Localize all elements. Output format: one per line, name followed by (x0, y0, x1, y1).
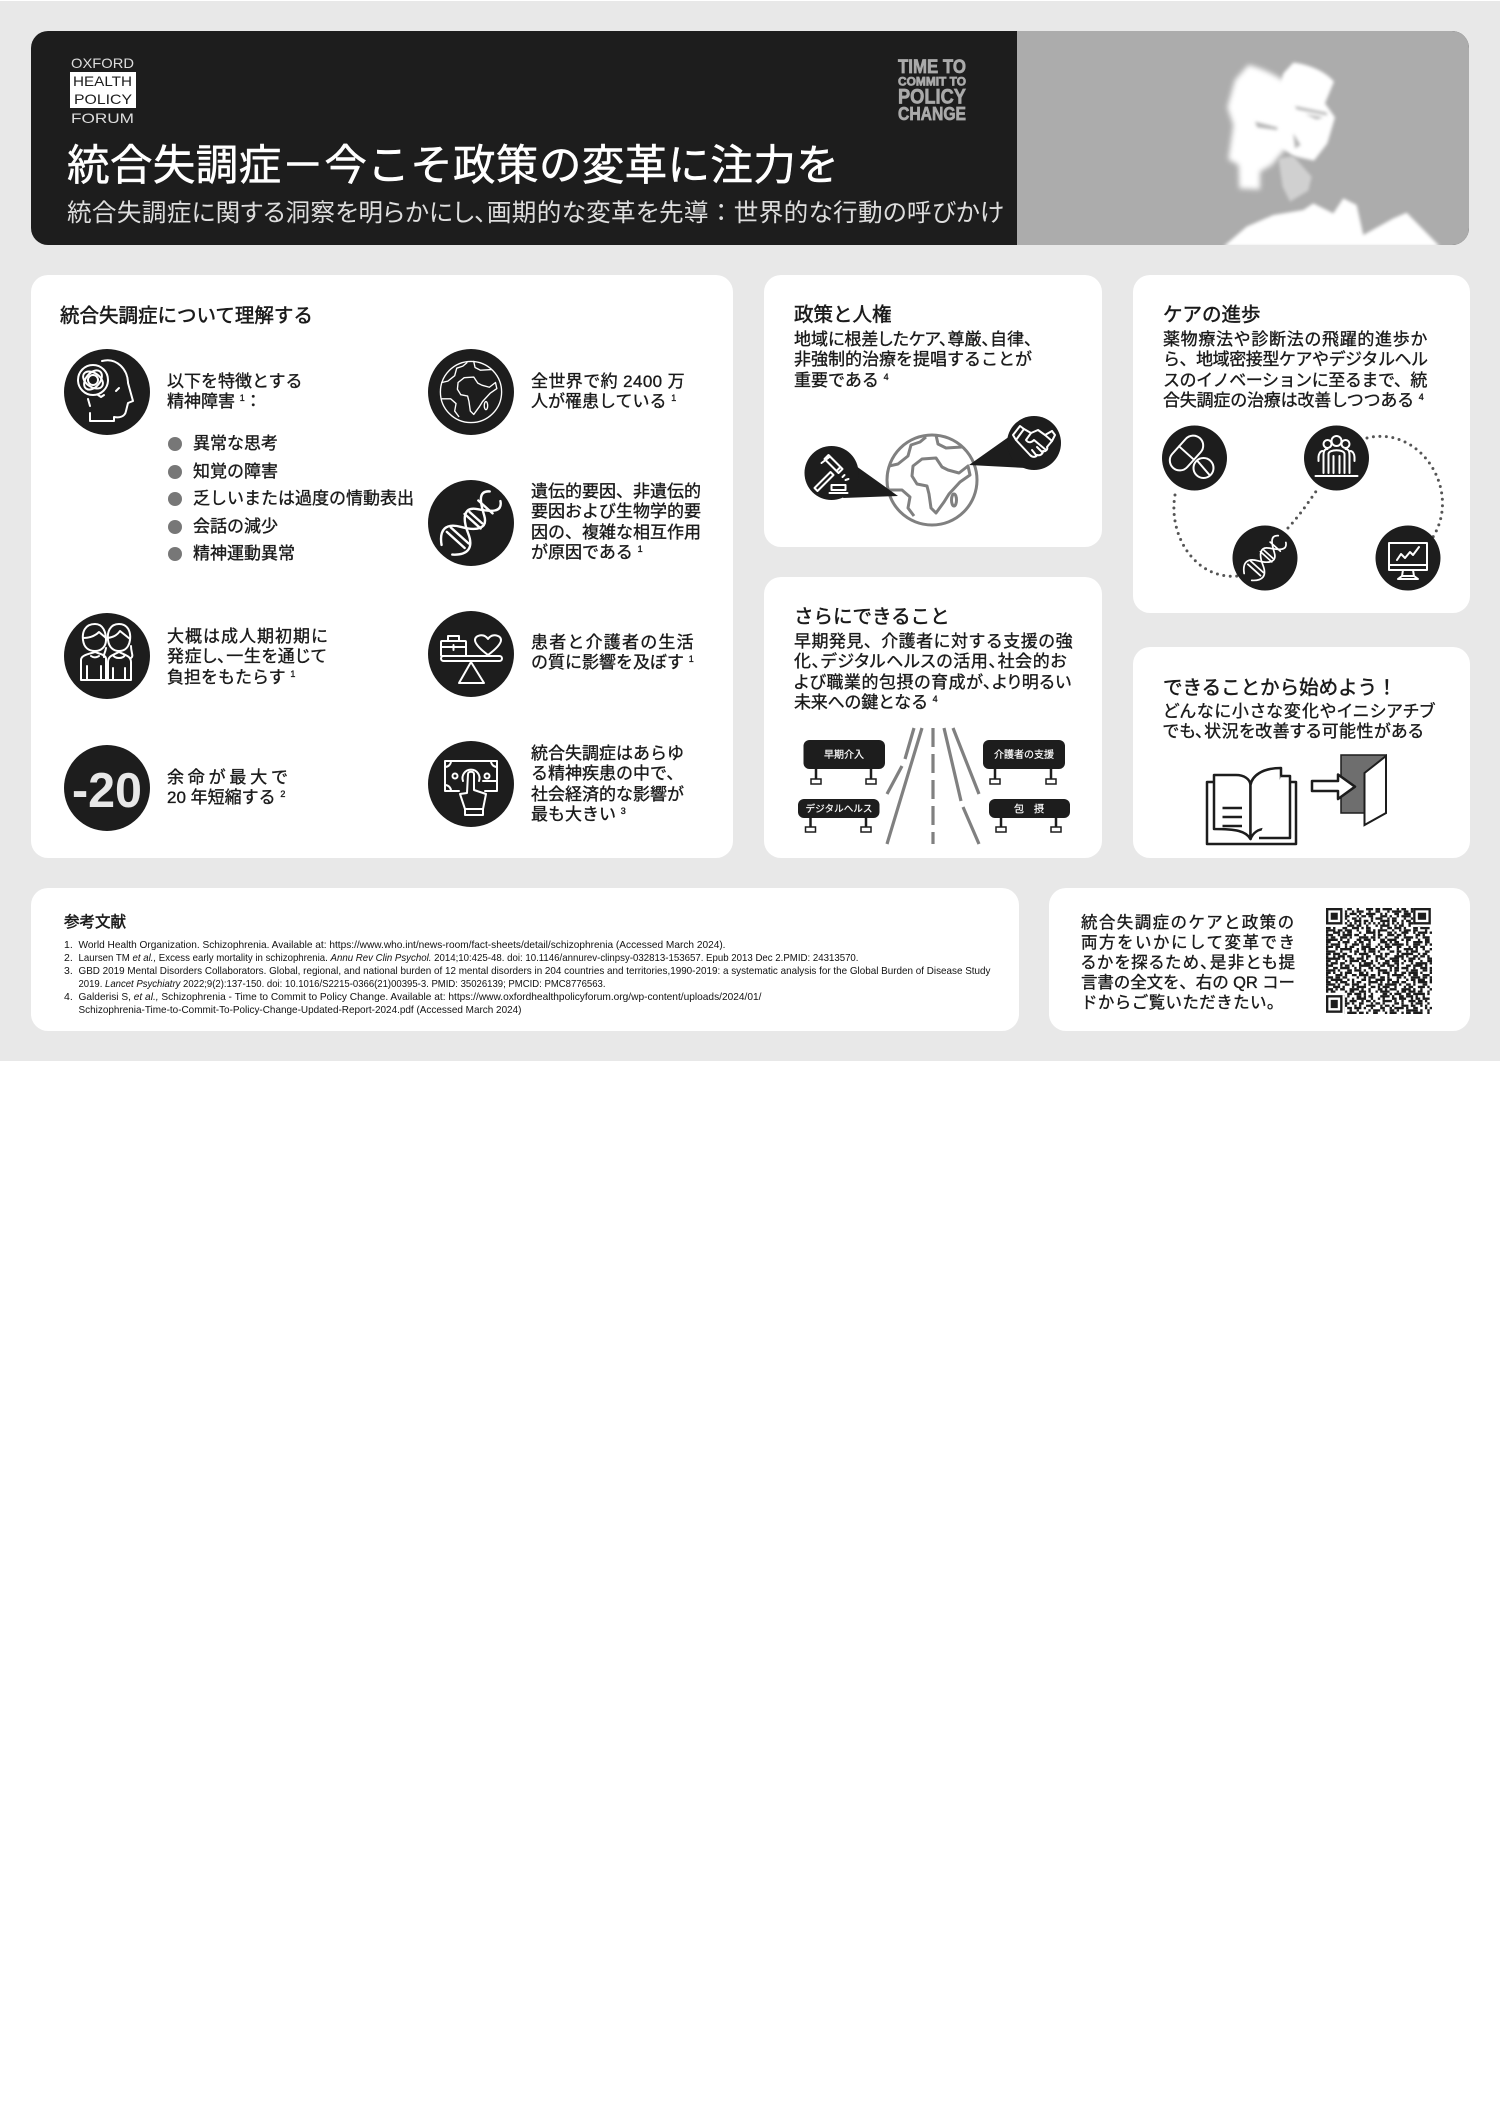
icon: globe (428, 349, 514, 435)
text: 24 million people (531, 372, 685, 411)
symptom 4: 会話の減少 (193, 517, 278, 536)
text: 非強制的治療を提唱することが (794, 350, 1032, 369)
icon: pills (1162, 426, 1227, 490)
text: 言書の全文を、右の QR コー (1081, 974, 1295, 992)
icon: DNA (1232, 526, 1298, 590)
text: 両方をいかにして変革でき (1081, 934, 1297, 952)
panel: QR call to action (1049, 888, 1470, 1031)
symptom 5: 精神運動異常 (193, 544, 295, 563)
QR code (1326, 908, 1432, 1014)
text: socio-economic impact: 統合失調症はあらゆ (531, 744, 684, 763)
icon: community (1304, 426, 1369, 490)
text: 化、デジタルヘルスの活用、社会的お (794, 652, 1067, 671)
illustration: arrow entering door (1310, 754, 1387, 827)
text: 地域に根差したケア、尊厳、自律、 (794, 330, 1032, 349)
symptom 3: 乏しいまたは過度の情動表出 (193, 489, 414, 508)
sign: caregiver support (983, 740, 1065, 784)
icon: young people (64, 613, 150, 699)
heading: 参考文献 (64, 914, 126, 931)
icon: monitor with chart (1376, 526, 1440, 590)
reference list: 2. (64, 952, 73, 964)
icon: minus 20 years: -20 (72, 764, 142, 818)
chest (1223, 198, 1440, 247)
callout: handshake (969, 416, 1061, 470)
text: ら、地域密接型ケアやデジタルヘル (1163, 350, 1428, 369)
subtitle: 統合失調症に関する洞察を明らかにし、画期的な変革を先導：世界的な行動の呼びかけ (67, 200, 1004, 227)
sign: early intervention: 早期介入 (824, 749, 864, 761)
header photo: two faces (1017, 31, 1469, 245)
text: ドからご覧いただきたい。 (1081, 994, 1284, 1012)
eye shadows (1255, 106, 1327, 148)
symptom 1: 異常な思考 (193, 434, 278, 453)
text: よび職業的包摂の育成が、より明るい (794, 673, 1072, 692)
back face (1227, 65, 1290, 189)
front face (1275, 63, 1335, 161)
text: quality of life: の質に影響を及ぼす 1 (531, 653, 694, 672)
icon: head with tangled mind (64, 349, 150, 435)
logo: Oxford Health Policy Forum: OXFORD (71, 55, 134, 71)
text: causes: 要因および生物学的要 (531, 502, 701, 521)
reference list (64, 939, 991, 1016)
text: onset and burden: 大概は成人期初期に (167, 627, 329, 646)
text: 未来への鍵となる 4 (794, 693, 938, 712)
logo: Oxford Health Policy Forum: POLICY (74, 91, 133, 107)
text: life expectancy: 20 年短縮する 2 (167, 788, 285, 807)
text: defining mental disorder: 精神障害 1： (167, 392, 262, 411)
header banner (31, 31, 1469, 245)
panel: what more can be done (764, 577, 1102, 858)
text: onset and burden (167, 627, 329, 687)
text: socio-economic impact (531, 744, 684, 824)
panel: start with what you can do (1133, 647, 1470, 858)
illustration: dotted pathway through four icons (1162, 426, 1444, 590)
text: socio-economic impact: 社会経済的な影響が (531, 785, 684, 804)
text (1163, 330, 1428, 410)
text: 統合失調症のケアと政策の (1081, 914, 1295, 932)
panel: references (31, 888, 1019, 1031)
text: 早期発見、介護者に対する支援の強 (794, 632, 1073, 651)
beard (1278, 156, 1312, 202)
illustration: open book (1206, 766, 1298, 846)
icon: minus 20 years (64, 745, 150, 831)
text (794, 330, 1032, 390)
text: quality of life (531, 633, 695, 672)
heading: 統合失調症について理解する (60, 305, 313, 327)
page background (0, 1, 1500, 1061)
reference list: 2019. Lancet Psychiatry 2022;9(2):137-150. doi: 10.1016/S2215-0366(21)00395-3. PMID: 35026139; PMCID: PMC8776563. (78, 978, 606, 990)
logo: Time to Commit to Policy Change: COMMIT TO (898, 76, 966, 88)
logo: Oxford Health Policy Forum: FORUM (71, 110, 134, 126)
text: causes: 因の、複雑な相互作用 (531, 523, 701, 542)
text: quality of life: 患者と介護者の生活 (531, 633, 695, 652)
illustration: road with four signs (798, 727, 1070, 845)
reference list: Laursen TM et al., Excess early mortality in schizophrenia. Annu Rev Clin Psychol. 2014;10:425-48. doi: 10.1146/annurev-clinpsy-032813-153657. Epub 2013 Dec 2.PMID: 24313570. (78, 952, 858, 964)
reference list: World Health Organization. Schizophrenia. Available at: https://www.who.int/news-room/fact-sheets/detail/schizophrenia (Accessed March 2024). (78, 939, 726, 951)
sign: early intervention (804, 740, 885, 784)
text: life expectancy: 余命が最大で (167, 768, 292, 787)
logo: Time to Commit to Policy Change (898, 57, 966, 124)
text: どんなに小さな変化やイニシアチブ (1163, 702, 1436, 721)
sign: digital health: デジタルヘルス (806, 803, 872, 815)
reference list: Schizophrenia-Time-to-Commit-To-Policy-Change-Updated-Report-2024.pdf (Accessed March 2024) (78, 1004, 522, 1016)
text: life expectancy (167, 768, 292, 807)
text: onset and burden: 負担をもたらす 1 (167, 668, 295, 687)
text: causes: 遺伝的要因、非遺伝的 (531, 482, 701, 501)
reference list: Galderisi S, et al., Schizophrenia - Time to Commit to Policy Change. Available at: https://www.oxfordhealthpolicyforum.org/wp-content/uploads/2024/01/ (78, 991, 762, 1003)
symptom 2: 知覚の障害 (193, 462, 278, 481)
title: 統合失調症－今こそ政策の変革に注力を (67, 142, 839, 190)
icon: hand holding banknote (428, 741, 514, 827)
heading: ケアの進歩 (1163, 304, 1261, 326)
text: defining mental disorder: 以下を特徴とする (167, 372, 302, 391)
heading: さらにできること (794, 606, 950, 628)
sign: digital health (798, 799, 880, 832)
text (1081, 914, 1297, 1012)
text: causes: が原因である 1 (531, 543, 643, 562)
logo: Oxford Health Policy Forum (70, 55, 136, 126)
text: socio-economic impact: 最も大きい 3 (531, 805, 626, 824)
illustration: globe with speech callouts (804, 416, 1061, 526)
heading: できることから始めよう！ (1163, 677, 1397, 699)
icon: DNA (428, 480, 514, 566)
text: 重要である 4 (794, 371, 889, 390)
reference list: 1. (64, 939, 73, 951)
globe (887, 435, 977, 525)
text (794, 632, 1073, 712)
text: るかを探るため、是非とも提 (1081, 954, 1297, 972)
heading: 政策と人権 (794, 304, 892, 326)
icon: balance of briefcase and heart (428, 611, 514, 697)
text: 薬物療法や診断法の飛躍的進歩か (1163, 330, 1428, 349)
text: defining mental disorder (167, 372, 302, 411)
reference list: 3. (64, 965, 73, 977)
text (1163, 702, 1436, 741)
text: 24 million people: 人が罹患している 1 (531, 392, 676, 411)
text: onset and burden: 発症し、一生を通じて (167, 647, 327, 666)
panel: understanding schizophrenia (31, 275, 733, 858)
callout: gavel (804, 446, 898, 500)
panel: advances in care (1133, 275, 1470, 613)
logo: Oxford Health Policy Forum: HEALTH (73, 73, 132, 89)
road lines (887, 728, 979, 844)
text: 24 million people: 全世界で約 2400 万 (531, 372, 685, 391)
text: 合失調症の治療は改善しつつある 4 (1163, 391, 1424, 410)
reference list: 4. (64, 991, 73, 1003)
sign: inclusion (989, 799, 1070, 832)
sign: inclusion: 包 摂 (1014, 802, 1044, 816)
text: スのイノベーションに至るまで、統 (1163, 371, 1427, 390)
sign: caregiver support: 介護者の支援 (994, 748, 1054, 761)
text: socio-economic impact: る精神疾患の中で、 (531, 764, 683, 783)
panel: policy and human rights (764, 275, 1102, 547)
text: causes (531, 482, 701, 562)
dotted path (1174, 436, 1442, 576)
text: でも、状況を改善する可能性がある (1163, 722, 1424, 741)
list of symptoms (168, 434, 414, 563)
